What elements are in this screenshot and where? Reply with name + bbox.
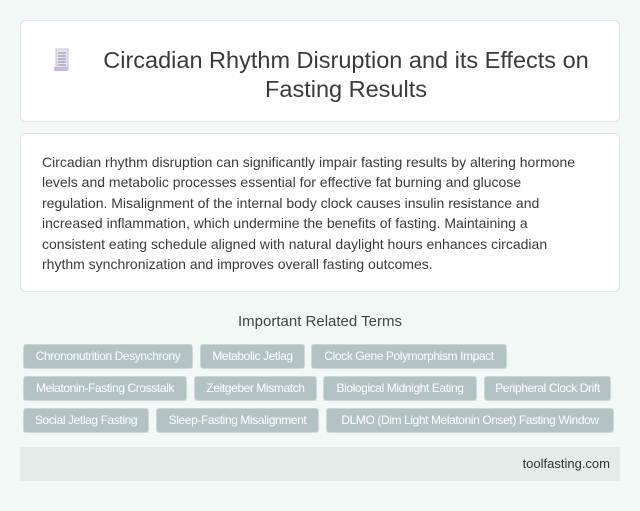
tags: Biological Midnight Eating	[336, 381, 464, 395]
footer text: toolfasting.com	[523, 456, 610, 471]
tags: Zeitgeber Mismatch	[206, 381, 305, 395]
title: Fasting Results	[265, 76, 427, 102]
description text: levels and metabolic processes essential for effective fat burning and glucose	[42, 174, 521, 190]
footer	[20, 447, 620, 481]
title: Circadian Rhythm Disruption and its Effects on	[103, 47, 589, 73]
description text: rhythm synchronization and improves overall fasting outcomes.	[42, 256, 433, 272]
tags: Sleep-Fasting Misalignment	[169, 413, 306, 427]
title	[103, 47, 589, 102]
section heading: Important Related Terms	[238, 313, 402, 330]
description card	[20, 133, 620, 292]
icon: document	[54, 48, 68, 71]
tags: Social Jetlag Fasting	[35, 413, 137, 427]
tags: Chrononutrition Desynchrony	[36, 349, 180, 363]
description text: increased inflammation, which undermine the benefits of fasting. Maintaining a	[42, 215, 528, 231]
tags: DLMO (Dim Light Melatonin Onset) Fasting Window	[341, 413, 599, 427]
description text: consistent eating schedule aligned with natural daylight hours enhances circadian	[42, 236, 547, 252]
description text: regulation. Misalignment of the internal body clock causes insulin resistance and	[42, 195, 539, 211]
tags: Melatonin-Fasting Crosstalk	[36, 381, 174, 395]
tags: Clock Gene Polymorphism Impact	[324, 349, 494, 363]
tags: Peripheral Clock Drift	[495, 381, 600, 395]
description text	[42, 154, 575, 272]
tags: Metabolic Jetlag	[212, 349, 293, 363]
description text: Circadian rhythm disruption can significantly impair fasting results by altering hormone	[42, 154, 575, 170]
header card	[20, 20, 620, 122]
